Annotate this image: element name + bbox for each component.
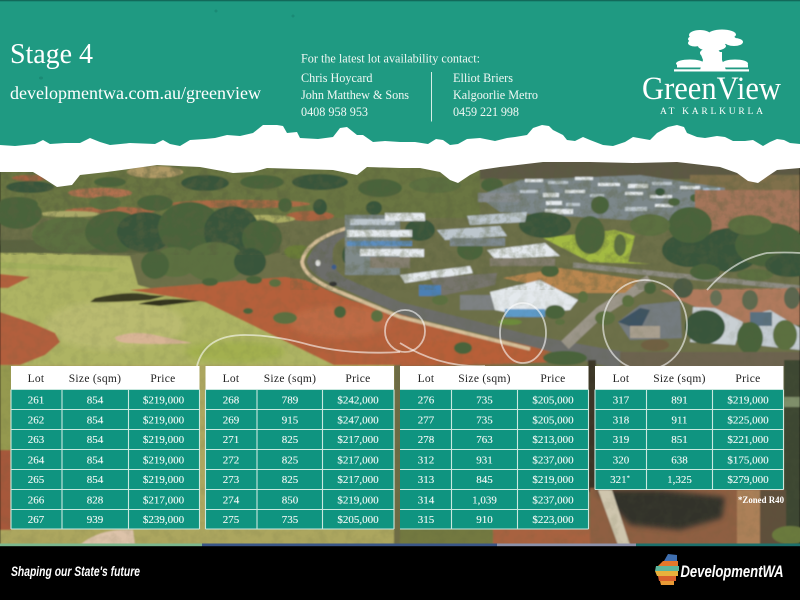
price table 4: 891 (671, 394, 688, 406)
price table 3: 845 (476, 474, 493, 486)
price table 1: 261 (28, 394, 44, 406)
price table 2: 825 (282, 454, 299, 466)
price table 3: 315 (418, 514, 435, 526)
near houses (345, 212, 800, 367)
price table 3: Price (540, 373, 566, 385)
price table 3: 312 (418, 454, 434, 466)
mid tree belt and lawn (342, 190, 800, 281)
price table 3: $205,000 (532, 414, 574, 426)
contact divider (431, 72, 432, 122)
price table 1: 265 (28, 474, 45, 486)
price table 3: $219,000 (532, 474, 574, 486)
price table 2: 274 (223, 494, 240, 506)
price table 1: Price (150, 373, 176, 385)
price table 4: * (627, 474, 630, 482)
price table 4: 911 (671, 414, 688, 426)
icon: tree (674, 30, 749, 72)
houses far cluster (478, 175, 755, 227)
price table 4: $221,000 (727, 434, 769, 446)
teal header panel (0, 0, 800, 146)
lower photo strips around the tables (0, 360, 800, 545)
main tree line (0, 199, 327, 286)
contact block (301, 52, 538, 122)
price table 2: 825 (282, 434, 299, 446)
price table 3: 931 (476, 454, 493, 466)
price table 3: $237,000 (532, 494, 574, 506)
price table 4: Size (sqm) (653, 373, 706, 385)
price table 3: Lot (418, 373, 435, 385)
price table 1: 266 (28, 494, 45, 506)
price table 1: $219,000 (143, 394, 185, 406)
price table 3: 278 (418, 434, 435, 446)
price table 1: Lot (28, 373, 45, 385)
price table 2: 269 (223, 414, 240, 426)
contact: Elliot Briers (453, 71, 538, 119)
price table 3: $213,000 (532, 434, 574, 446)
price table 2: Price (345, 373, 371, 385)
price table 1: 264 (28, 454, 45, 466)
price table 1: $217,000 (143, 494, 185, 506)
footer bar (0, 544, 800, 600)
price table 3: 735 (476, 394, 493, 406)
decorative white ring outlines (197, 252, 800, 370)
fairway (0, 252, 340, 368)
footnote: zoned R40: *Zoned R40 (738, 496, 784, 506)
aerial photo background (0, 120, 800, 548)
price table 2: 915 (282, 414, 299, 426)
mottled photo texture (0, 150, 800, 545)
curving road (302, 228, 800, 370)
price table 2: 789 (282, 394, 299, 406)
logo wordmark: GreenView (642, 71, 781, 107)
price table 4: 638 (671, 454, 688, 466)
price table 2: $217,000 (337, 434, 379, 446)
price table 1: 263 (28, 434, 45, 446)
price table 1: $219,000 (143, 434, 185, 446)
bare lots (503, 265, 800, 325)
logo tagline: AT KARLKURLA (660, 107, 763, 117)
footer tagline: Shaping our State's future (11, 564, 140, 579)
price table 4: 851 (671, 434, 688, 446)
heading: Stage 4: Stage 4 (10, 39, 93, 70)
price table 2: 268 (223, 394, 240, 406)
price table 3: 910 (476, 514, 493, 526)
contact: Chris Hoycard: 0408 958 953 (301, 105, 368, 119)
price table 2: 275 (223, 514, 240, 526)
price table 3: $223,000 (532, 514, 574, 526)
price table 3 (400, 366, 588, 529)
price table 1: $219,000 (143, 414, 185, 426)
contact: Elliot Briers: 0459 221 998 (453, 105, 519, 119)
price table 3: 313 (418, 474, 435, 486)
price table 3: 763 (476, 434, 493, 446)
price table 1: $219,000 (143, 474, 185, 486)
price table 1: 854 (87, 414, 104, 426)
price table 4: Lot (613, 373, 630, 385)
distant bushland band (0, 160, 800, 235)
price table 4: $175,000 (727, 454, 769, 466)
price table 2: 272 (223, 454, 239, 466)
price table 2: $217,000 (337, 474, 379, 486)
price table 3: 277 (418, 414, 435, 426)
price table 1 (11, 366, 200, 529)
price table 2: Lot (223, 373, 240, 385)
price table 2: $205,000 (337, 514, 379, 526)
red earth (90, 276, 560, 368)
price table 1: 828 (87, 494, 104, 506)
price table 4: Price (735, 373, 761, 385)
price table 1: 854 (87, 394, 104, 406)
price table 3: $205,000 (532, 394, 574, 406)
price table 4: 318 (613, 414, 630, 426)
price table 4: 1,325 (667, 474, 692, 486)
price table 1: 267 (28, 514, 45, 526)
price table 4: 319 (613, 434, 630, 446)
contact: Elliot Briers: Elliot Briers (453, 71, 513, 85)
price table 1: $239,000 (143, 514, 185, 526)
price table 1: $219,000 (143, 454, 185, 466)
price table 2: 825 (282, 474, 299, 486)
price table 3: 276 (418, 394, 435, 406)
price table 3: $237,000 (532, 454, 574, 466)
price table 4: 317 (613, 394, 630, 406)
price table 2: 850 (282, 494, 299, 506)
price table 2: $247,000 (337, 414, 379, 426)
price table 2: 273 (223, 474, 240, 486)
price table 3: 314 (418, 494, 435, 506)
price table 2: 271 (223, 434, 239, 446)
icon: DevelopmentWA map logo (655, 554, 679, 585)
price table 2: $219,000 (337, 494, 379, 506)
contact: Chris Hoycard: John Matthew & Sons (301, 88, 409, 102)
price table 4: $225,000 (727, 414, 769, 426)
price table 4: $219,000 (727, 394, 769, 406)
footer colour stripe (0, 544, 800, 546)
price table 1: 854 (87, 474, 104, 486)
contact: Chris Hoycard: Chris Hoycard (301, 71, 372, 85)
price table 1: Size (sqm) (69, 373, 121, 385)
price table 2: Size (sqm) (264, 373, 316, 385)
GreenView logo (642, 30, 781, 117)
price table 1: 939 (87, 514, 104, 526)
price table 2 (206, 366, 394, 529)
price table 3: 735 (476, 414, 493, 426)
torn white paper band (0, 120, 800, 187)
price table 4 (595, 366, 784, 490)
price table 4: 321 (610, 474, 627, 486)
price table 4: 320 (613, 454, 630, 466)
contact: Chris Hoycard (301, 71, 409, 119)
price table 2: 735 (282, 514, 299, 526)
price table 3: 1,039 (472, 494, 497, 506)
price table 3: Size (sqm) (458, 373, 511, 385)
price table 1: 262 (28, 414, 44, 426)
contact intro: For the latest lot availability contact: (301, 52, 480, 66)
contact: Elliot Briers: Kalgoorlie Metro (453, 88, 538, 102)
price table 2: $242,000 (337, 394, 379, 406)
price table 1: 854 (87, 454, 104, 466)
price table 2: $217,000 (337, 454, 379, 466)
price table 1: 854 (87, 434, 104, 446)
website address: developmentwa.com.au/greenview (10, 83, 261, 103)
price table 4: $279,000 (727, 474, 769, 486)
